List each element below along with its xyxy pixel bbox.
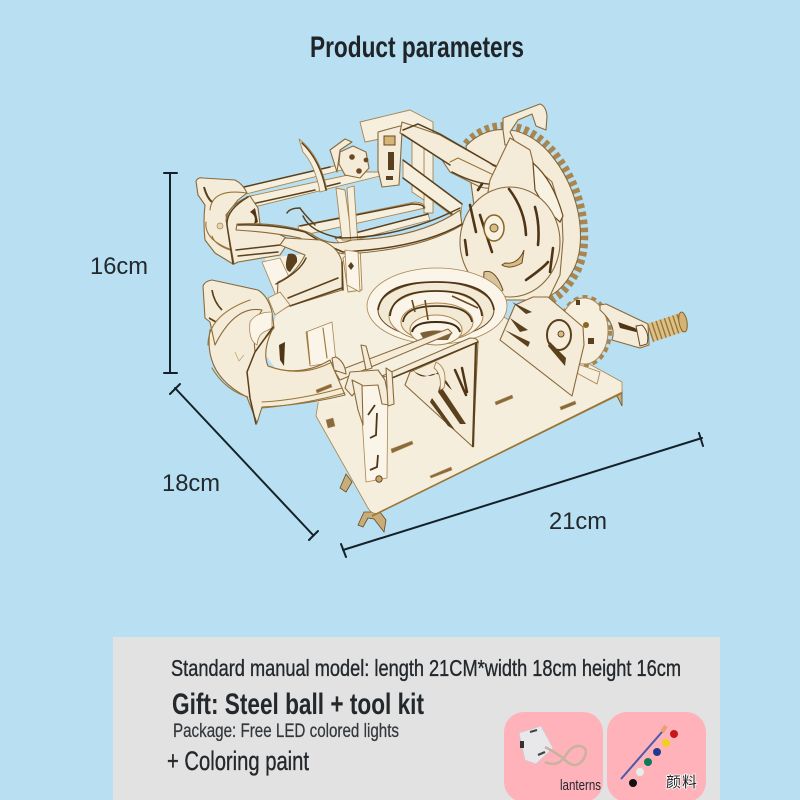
frame post xyxy=(378,126,402,187)
spec: standard model size: Standard manual model: length 21CM*width 18cm height 16cm xyxy=(171,655,681,681)
S curved tracks xyxy=(236,208,462,254)
spec: coloring paint: + Coloring paint xyxy=(167,746,309,776)
spec: package: Package: Free LED colored lights xyxy=(173,721,399,742)
large gear teeth xyxy=(466,126,584,302)
title: Product parameters xyxy=(310,31,524,64)
width dimension line xyxy=(170,384,318,540)
tile: LED lanterns xyxy=(504,712,603,800)
gear support xyxy=(500,297,584,396)
height dimension line xyxy=(164,173,177,373)
icon: light string xyxy=(545,746,586,765)
label: lanterns: lanterns xyxy=(560,777,601,794)
spec: gift: Gift: Steel ball + tool kit xyxy=(172,688,424,721)
central spoked disc xyxy=(460,184,560,297)
wooden marble run model xyxy=(196,104,689,532)
funnel spout arms xyxy=(332,329,478,380)
back wall panels xyxy=(262,225,505,402)
tile: paint set xyxy=(607,712,706,800)
gear upright frame xyxy=(480,104,563,300)
middle track block xyxy=(276,238,360,306)
upper left curved track xyxy=(196,178,290,264)
panel: specifications xyxy=(113,637,720,800)
lower curved track xyxy=(203,280,345,424)
front post xyxy=(345,368,394,482)
length dimension line xyxy=(341,433,703,557)
icon: paint dots xyxy=(629,730,678,787)
base plate xyxy=(316,315,622,532)
label: 16cm: 16cm xyxy=(90,253,148,280)
top frame and rear rails xyxy=(287,110,462,245)
icon: paint brush xyxy=(621,726,666,779)
spiral funnel xyxy=(367,268,507,345)
label: 18cm: 18cm xyxy=(162,470,220,497)
upper left rails and hex wheel xyxy=(243,126,402,208)
crank arm and handle xyxy=(600,304,689,348)
small gear xyxy=(560,298,608,384)
top slide rail xyxy=(400,122,520,189)
icon: battery box xyxy=(519,726,553,764)
label: paint: 颜料 xyxy=(666,771,697,792)
connector rails xyxy=(268,292,290,315)
label: 21cm: 21cm xyxy=(549,508,607,535)
large gear wheel xyxy=(466,129,581,300)
triangular funnel support xyxy=(405,342,478,447)
hex wheel xyxy=(330,139,369,178)
